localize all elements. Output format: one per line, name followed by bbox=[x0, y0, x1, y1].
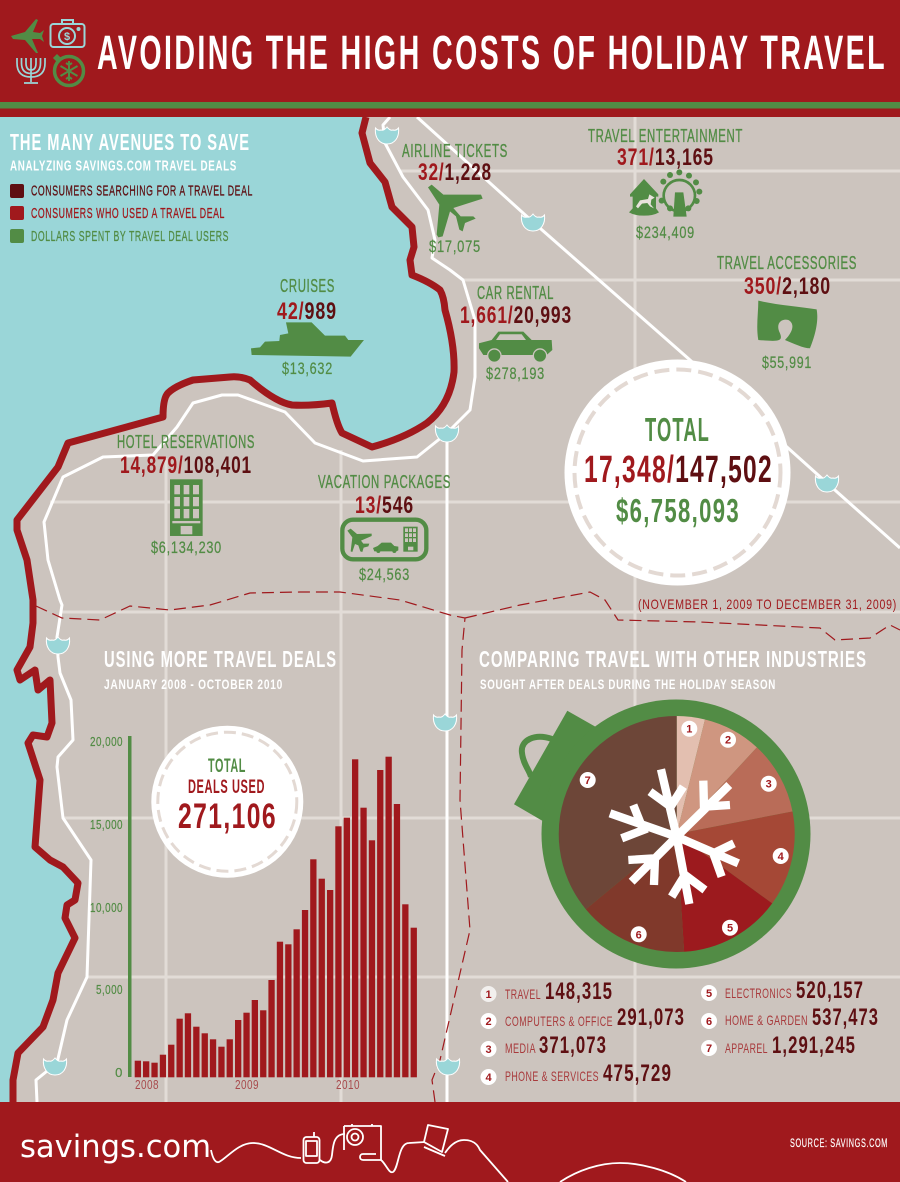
callout: total deals used: 271,106 bbox=[178, 797, 277, 836]
row: phone: 475,729 bbox=[603, 1060, 672, 1087]
heading: many avenues: THE MANY AVENUES TO SAVE bbox=[10, 129, 250, 155]
y axis labels: 5,000 bbox=[96, 982, 123, 997]
block: vacation packages: VACATION PACKAGES bbox=[318, 472, 451, 492]
block: cruises bbox=[251, 276, 364, 378]
block: travel accessories: $55,991 bbox=[762, 353, 812, 372]
y axis labels: 0 bbox=[115, 1065, 123, 1080]
block: hotel reservations: 14,879/108,401 bbox=[120, 452, 252, 479]
y axis labels bbox=[90, 734, 123, 1080]
row: apparel bbox=[701, 1032, 856, 1059]
map: grid roads bbox=[50, 117, 900, 1102]
callout: total circle: 17,348/147,502 bbox=[584, 449, 773, 491]
block: airline tickets bbox=[402, 141, 508, 256]
pie number badges: 5 bbox=[727, 923, 733, 935]
icon: car bbox=[479, 332, 552, 362]
y axis labels: 20,000 bbox=[90, 734, 123, 749]
row: travel: 1 bbox=[485, 989, 492, 1001]
x axis years: 2010 bbox=[336, 1077, 360, 1092]
ornament cap and loop bbox=[514, 711, 610, 830]
map: highways bbox=[36, 117, 900, 1102]
block: vacation packages: $24,563 bbox=[359, 565, 410, 584]
pie number badges: 4 bbox=[778, 851, 785, 863]
row: media bbox=[480, 1032, 607, 1059]
pie number badges: 7 bbox=[585, 775, 591, 787]
row: computers: 2 bbox=[485, 1016, 492, 1028]
pie number badges: 1 bbox=[686, 724, 692, 736]
block: airline tickets: 32/1,228 bbox=[418, 159, 492, 186]
row: electronics bbox=[701, 977, 864, 1004]
icon: neck pillow bbox=[757, 301, 817, 348]
row: phone bbox=[480, 1060, 672, 1087]
pie number badges bbox=[580, 721, 789, 942]
icon: airplane bbox=[428, 185, 483, 237]
block: car rental: $278,193 bbox=[486, 364, 545, 383]
callout: total circle: $6,758,093 bbox=[616, 492, 740, 529]
row: home and garden: HOME & GARDEN bbox=[725, 1012, 808, 1028]
block: travel entertainment: 371/13,165 bbox=[617, 144, 714, 171]
icon: header camera: $ bbox=[64, 31, 70, 43]
icon: header plane bbox=[11, 19, 44, 53]
icon: menorah bbox=[17, 58, 45, 83]
subheading: date span: JANUARY 2008 - OCTOBER 2010 bbox=[104, 676, 283, 692]
block: vacation packages bbox=[318, 472, 451, 584]
callout: total deals used: TOTAL bbox=[208, 756, 246, 777]
y axis labels: 15,000 bbox=[90, 817, 123, 832]
block: hotel reservations bbox=[117, 432, 255, 557]
squiggle line with gadgets bbox=[211, 1124, 686, 1182]
pie number badges: 3 bbox=[766, 779, 772, 791]
row: computers: COMPUTERS & OFFICE bbox=[505, 1013, 613, 1029]
row: travel bbox=[480, 978, 613, 1005]
subheading: sought after deals: SOUGHT AFTER DEALS DURING THE HOLIDAY SEASON bbox=[480, 676, 776, 692]
legend: searching: CONSUMERS SEARCHING FOR A TRAVEL DEAL bbox=[31, 182, 253, 200]
block: hotel reservations: $6,134,230 bbox=[151, 538, 222, 557]
row: media: 371,073 bbox=[539, 1032, 607, 1059]
legend: searching bbox=[10, 182, 253, 200]
callout: total circle: TOTAL bbox=[645, 411, 710, 448]
row: electronics: 520,157 bbox=[796, 977, 864, 1004]
block: travel accessories bbox=[717, 253, 857, 372]
block: cruises: $13,632 bbox=[282, 359, 333, 378]
row: home and garden bbox=[701, 1004, 879, 1031]
x axis years bbox=[135, 1077, 360, 1092]
row: travel: TRAVEL bbox=[505, 986, 541, 1002]
row: apparel: 1,291,245 bbox=[772, 1032, 856, 1059]
map: coastline bbox=[13, 117, 454, 1102]
block: travel entertainment bbox=[588, 126, 743, 242]
snowflake bbox=[610, 769, 738, 904]
row: media: 3 bbox=[485, 1044, 492, 1056]
icon: hotel building bbox=[170, 479, 203, 536]
map: state border dashed bbox=[36, 592, 900, 1102]
block: hotel reservations: HOTEL RESERVATIONS bbox=[117, 432, 255, 452]
row: phone: PHONE & SERVICES bbox=[505, 1068, 599, 1084]
block: vacation packages: 13/546 bbox=[355, 492, 414, 519]
callout: total deals used bbox=[151, 726, 303, 878]
pie number badges: 6 bbox=[636, 929, 642, 941]
subheading: analyzing: ANALYZING SAVINGS.COM TRAVEL DEALS bbox=[10, 158, 237, 174]
block: cruises: CRUISES bbox=[280, 276, 335, 296]
block: car rental: 1,661/20,993 bbox=[460, 302, 572, 329]
block: cruises: 42/989 bbox=[277, 298, 337, 325]
block: airline tickets: $17,075 bbox=[429, 237, 481, 256]
pie number badges: 2 bbox=[725, 735, 731, 747]
block: car rental bbox=[460, 283, 572, 383]
row: home and garden: 6 bbox=[706, 1016, 712, 1028]
block: car rental: CAR RENTAL bbox=[477, 283, 554, 303]
block: travel accessories: 350/2,180 bbox=[744, 273, 831, 300]
row: computers bbox=[480, 1004, 685, 1031]
callout: total deals used: DEALS USED bbox=[188, 777, 265, 798]
logo: savings.com: savings.com bbox=[20, 1129, 211, 1165]
x axis years: 2009 bbox=[235, 1077, 259, 1092]
footer band bbox=[0, 1102, 900, 1182]
row: apparel: APPAREL bbox=[725, 1040, 768, 1056]
row: phone: 4 bbox=[485, 1072, 492, 1084]
bars bbox=[135, 757, 417, 1077]
icon: boat bbox=[251, 322, 364, 357]
chart axis bbox=[128, 736, 132, 1077]
map: water bbox=[0, 117, 454, 1102]
icon: package box bbox=[342, 520, 426, 559]
callout: total circle bbox=[564, 360, 790, 586]
row: travel: 148,315 bbox=[545, 978, 613, 1005]
y axis labels: 10,000 bbox=[90, 900, 123, 915]
row: computers: 291,073 bbox=[617, 1004, 685, 1031]
block: travel entertainment: TRAVEL ENTERTAINMENT bbox=[588, 126, 743, 146]
legend: dollars bbox=[10, 228, 229, 245]
row: electronics: ELECTRONICS bbox=[725, 985, 792, 1001]
panel: many avenues legend bbox=[10, 129, 253, 245]
block: airline tickets: AIRLINE TICKETS bbox=[402, 141, 508, 161]
heading: using more travel deals: USING MORE TRAVEL DEALS bbox=[104, 646, 337, 672]
header band bbox=[0, 0, 900, 117]
legend: used: CONSUMERS WHO USED A TRAVEL DEAL bbox=[31, 205, 225, 222]
x axis years: 2008 bbox=[135, 1077, 159, 1092]
row: apparel: 7 bbox=[706, 1043, 712, 1055]
icon: header ornament bbox=[54, 55, 84, 86]
icon: header camera bbox=[50, 20, 84, 47]
legend: dollars: DOLLARS SPENT BY TRAVEL DEAL USERS bbox=[31, 228, 229, 245]
row: media: MEDIA bbox=[505, 1040, 536, 1056]
block: travel entertainment: $234,409 bbox=[636, 223, 695, 242]
pie slices bbox=[559, 716, 795, 952]
chart: ornament pie bbox=[514, 700, 810, 968]
row: electronics: 5 bbox=[706, 988, 712, 1000]
legend: used bbox=[10, 205, 225, 222]
highway shields bbox=[43, 127, 839, 1075]
bar chart: deals used bbox=[90, 734, 417, 1092]
icon: carousel and ferris wheel bbox=[629, 169, 702, 217]
legend: industries bbox=[480, 977, 879, 1087]
